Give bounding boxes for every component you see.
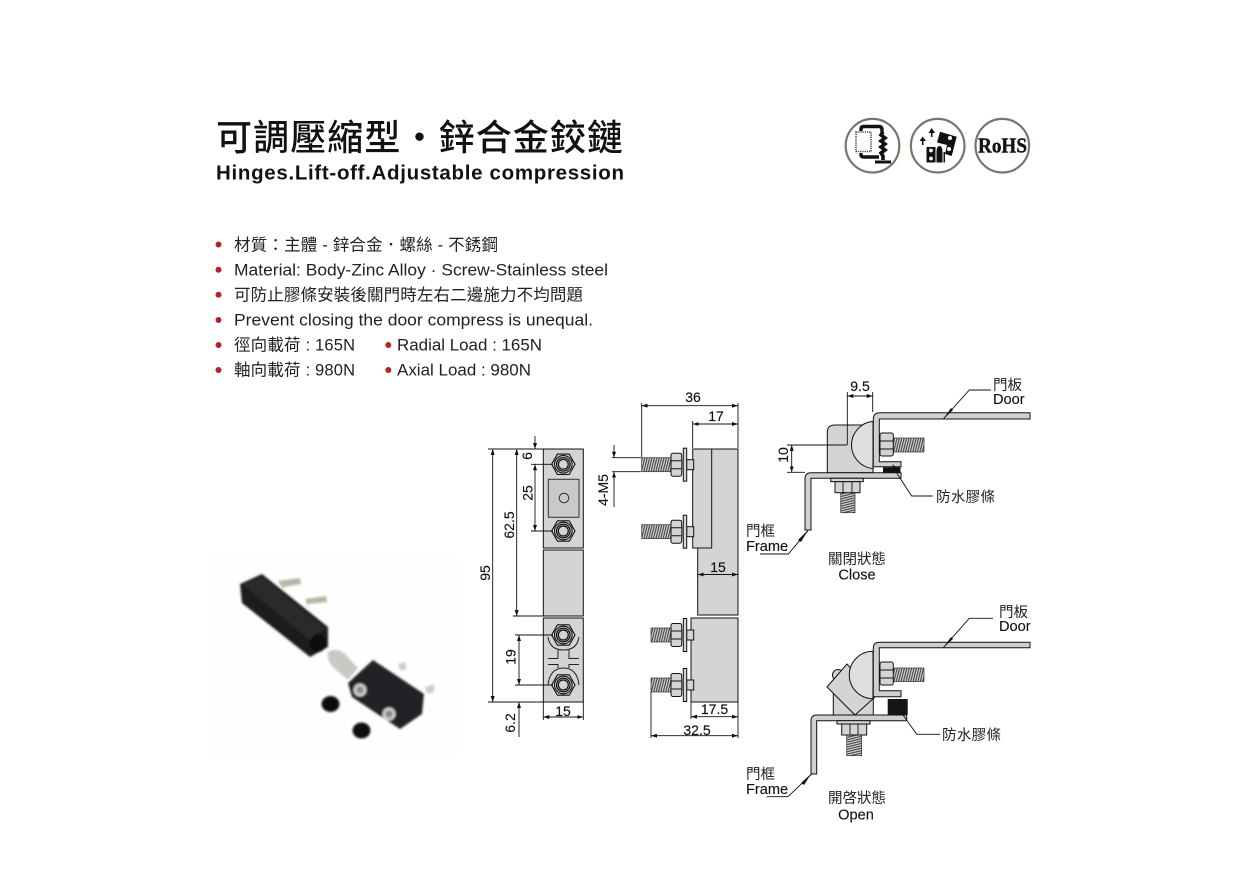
photo: ball pin xyxy=(328,650,358,680)
dimension labels: 95 xyxy=(477,565,493,581)
open door plate xyxy=(873,642,1030,697)
dimension labels: 6 xyxy=(519,452,535,460)
axial load en: Axial Load : 980N xyxy=(397,360,531,380)
closed labels: Door xyxy=(993,392,1025,408)
side body xyxy=(691,449,738,702)
closed labels: 門框 xyxy=(746,520,775,541)
side dimensions xyxy=(612,403,738,738)
material en: Material: Body-Zinc Alloy · Screw-Stainless steel xyxy=(234,260,608,280)
closed frame plate xyxy=(805,473,901,530)
photo: caps xyxy=(322,696,370,738)
closed leaders xyxy=(760,390,991,554)
icon: clamp compression xyxy=(846,119,899,172)
closed dimensions: 9.5 xyxy=(850,378,870,394)
closed labels xyxy=(746,374,1025,584)
closed dimensions: 10 xyxy=(775,447,791,463)
closed labels: Close xyxy=(838,568,876,584)
dimension labels: 15 xyxy=(555,703,571,719)
radial load zh: 徑向載荷 : 165N xyxy=(234,336,355,354)
icon row xyxy=(846,119,1029,172)
closed horizontal bolt xyxy=(880,433,924,456)
front view drawing xyxy=(477,436,583,737)
closed door plate xyxy=(873,413,1030,467)
closed state drawing xyxy=(746,374,1030,584)
side labels: 15 xyxy=(710,559,726,575)
front nuts xyxy=(552,454,575,695)
icon: RoHS: RoHS xyxy=(978,134,1027,158)
open state drawing xyxy=(746,601,1031,824)
open hinge body xyxy=(827,651,875,715)
product photo xyxy=(212,556,458,756)
closed hinge body and ball xyxy=(827,421,873,473)
side labels: 36 xyxy=(685,389,701,405)
open frame plate xyxy=(811,715,907,774)
open vertical bolt xyxy=(837,721,870,756)
front body xyxy=(543,449,583,702)
dimension labels: 62.5 xyxy=(501,511,517,539)
closed labels: 防水膠條 xyxy=(936,486,995,507)
spec list xyxy=(216,236,608,380)
dimension lines xyxy=(488,436,583,737)
subtitle: Hinges.Lift-off.Adjustable compression xyxy=(216,162,624,184)
side view drawing xyxy=(595,389,738,738)
open labels xyxy=(746,601,1031,824)
open labels: 門板 xyxy=(999,601,1028,622)
dimension labels: 25 xyxy=(519,485,535,501)
dimension labels: 6.2 xyxy=(502,713,518,733)
open horizontal bolt xyxy=(880,662,924,685)
closed vertical bolt xyxy=(831,478,863,513)
closed labels: Frame xyxy=(746,539,788,555)
radial load en: Radial Load : 165N xyxy=(397,336,542,354)
closed labels: 門板 xyxy=(993,374,1022,395)
material zh: 材質：主體 - 鋅合金．螺絲 - 不銹鋼 xyxy=(234,236,498,254)
open labels: Door xyxy=(999,619,1031,635)
prevention zh: 可防止膠條安裝後關門時左右二邊施力不均問題 xyxy=(234,286,583,304)
open labels: 門框 xyxy=(746,763,775,784)
photo: lower hinge block xyxy=(348,660,434,729)
open leaders xyxy=(767,618,993,797)
icon: lift-off blocks xyxy=(911,119,964,172)
open labels: Frame xyxy=(746,782,788,798)
open labels: 防水膠條 xyxy=(942,724,1001,745)
open labels: 開啓狀態 xyxy=(828,787,886,808)
title: 可調壓縮型・鋅合金鉸鏈 xyxy=(216,109,623,161)
open labels: Open xyxy=(838,808,874,824)
dimension labels: 19 xyxy=(503,649,519,665)
closed labels: 關閉狀態 xyxy=(828,548,886,569)
closed seal xyxy=(883,467,900,473)
side labels xyxy=(595,389,728,738)
side labels: 32.5 xyxy=(683,722,711,738)
axial load zh: 軸向載荷 : 980N xyxy=(234,360,355,380)
prevention en: Prevent closing the door compress is unequal. xyxy=(234,310,593,330)
closed dimensions xyxy=(775,378,873,472)
side labels: 17.5 xyxy=(701,701,728,717)
side bolts xyxy=(642,448,694,702)
open seal xyxy=(888,699,908,715)
bullets xyxy=(216,242,391,373)
icon: RoHS xyxy=(976,119,1029,172)
photo: upper hinge block xyxy=(240,574,328,657)
side labels: 4-M5 xyxy=(595,474,611,506)
side labels: 17 xyxy=(708,408,724,424)
dimension labels xyxy=(477,452,571,733)
